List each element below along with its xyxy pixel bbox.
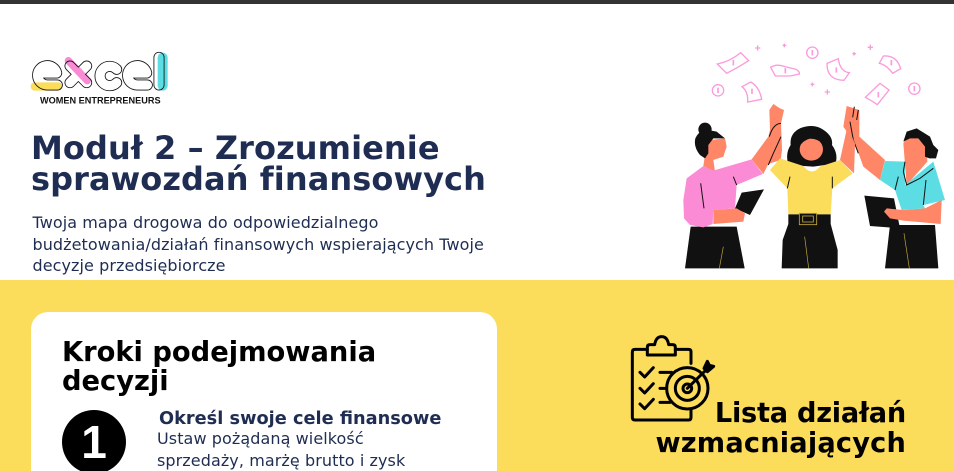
- heading: steps: Kroki podejmowania: [62, 337, 376, 368]
- figure: middle woman: [767, 123, 855, 268]
- heading: action list: [655, 398, 906, 459]
- heading: steps: decyzji: [62, 366, 169, 397]
- step number 1: 1: [81, 416, 107, 468]
- subtitle: Twoja mapa drogowa do odpowiedzialnego: [32, 213, 379, 232]
- logo: excel women entrepreneurs: WOMEN ENTREPRENEURS: [40, 96, 161, 106]
- icon: clipboard with target: [630, 335, 716, 422]
- logo: excel women entrepreneurs: [30, 52, 168, 106]
- title: [31, 129, 486, 198]
- subtitle: [32, 213, 484, 275]
- icon: flying banknotes: [712, 44, 920, 105]
- heading: action list: wzmacniających: [655, 428, 906, 459]
- title: Moduł 2 – Zrozumienie: [31, 129, 440, 167]
- figure: left woman: [683, 104, 784, 268]
- title: sprawozdań finansowych: [31, 160, 486, 198]
- step 1 text: Ustaw pożądaną wielkość: [157, 429, 364, 448]
- step 1 text: sprzedaży, marżę brutto i zysk: [157, 451, 405, 470]
- step 1 heading: Określ swoje cele finansowe: [159, 409, 441, 429]
- heading: action list: Lista działań: [715, 398, 906, 429]
- figure: right woman: [843, 106, 945, 268]
- step 1 text: [157, 429, 406, 470]
- panel: decision steps: [31, 312, 497, 471]
- yellow section background: [0, 280, 954, 471]
- subtitle: decyzje przedsiębiorcze: [32, 256, 226, 275]
- top bar: [0, 0, 954, 4]
- heading: steps: [62, 337, 376, 397]
- subtitle: budżetowania/działań finansowych wspierających Twoje: [32, 235, 484, 254]
- step number 1: [62, 410, 126, 471]
